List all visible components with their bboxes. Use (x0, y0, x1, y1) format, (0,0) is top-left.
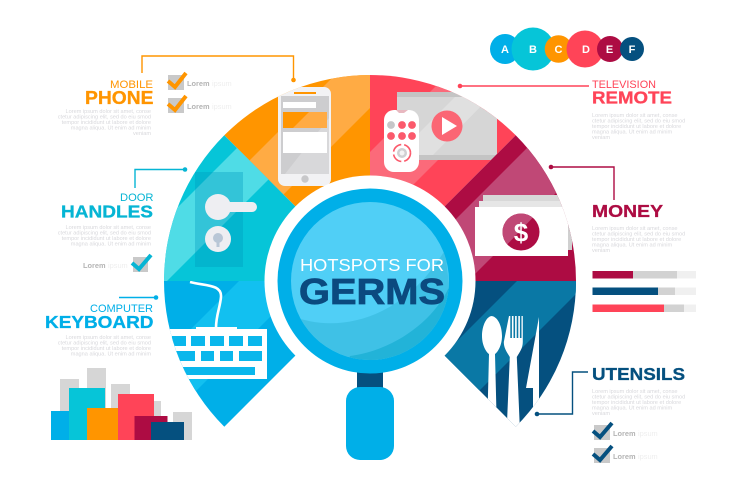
icon: door handle (195, 172, 257, 267)
checklist: utensils: Lorem (613, 452, 636, 461)
checklist: phone: ipsum (212, 102, 232, 111)
block: door handles (58, 167, 187, 272)
legend circles A-F (490, 28, 644, 70)
magnifying glass (264, 176, 476, 460)
block: utensils: magna aliqua. Ut enim ad minim (592, 406, 673, 412)
block: mobile phone: ctetur adipiscing elit, sed do eiu smod (58, 114, 151, 120)
block: money: Lorem ipsum dolor sit amet, conse (592, 226, 678, 232)
block: utensils: veniam (592, 411, 610, 417)
block: television remote: TELEVISION (592, 79, 656, 91)
legend circles A-F: F (629, 44, 636, 56)
text: germs: GERMS (299, 271, 445, 312)
bar chart: stacked blocks (51, 368, 192, 440)
block: door handles: DOOR (120, 192, 154, 204)
block: money: tempor incididunt ut labore et dolore (592, 237, 681, 243)
checklist: phone: Lorem (187, 79, 210, 88)
icon: spoon (482, 316, 502, 414)
block: mobile phone: Lorem ipsum dolor sit amet, conse (66, 109, 151, 115)
block: mobile phone: magna aliqua. Ut enim ad minim (71, 126, 151, 132)
block: television remote: magna aliqua. Ut enim ad minim (592, 130, 673, 136)
panel: mobile phone sector (224, 75, 370, 206)
block: door handles: magna aliqua. Ut enim ad minim (71, 242, 151, 248)
block: mobile phone: MOBILE (110, 79, 153, 91)
checklist: phone: ipsum (212, 79, 232, 88)
block: door handles: ctetur adipiscing elit, sed do eiu smod (58, 230, 151, 236)
block: money: ctetur adipiscing elit, sed do eiu smod (592, 232, 685, 238)
block: television remote: Lorem ipsum dolor sit amet, conse (592, 113, 678, 119)
checklist: phone: Lorem (187, 102, 210, 111)
checklist: utensils: Lorem (613, 429, 636, 438)
block: mobile phone: tempor incididunt ut labore et dolore (62, 120, 151, 126)
icon: television (397, 92, 497, 160)
icon: remote control (384, 110, 419, 172)
text: hotspots for: HOTSPOTS FOR (300, 255, 444, 275)
checklist: utensils: ipsum (638, 452, 658, 461)
panel: computer keyboard sector (164, 281, 296, 427)
panel: door handles sector (164, 135, 296, 281)
block: money: magna aliqua. Ut enim ad minim (592, 242, 673, 248)
block: door handles: Lorem ipsum dolor sit amet, conse (66, 225, 151, 231)
block: utensils: ctetur adipiscing elit, sed do eiu smod (592, 394, 685, 400)
icon: fork (504, 316, 523, 427)
checklist: door: ipsum (108, 261, 128, 270)
icon: knife (526, 317, 539, 407)
block: television remote: ctetur adipiscing elit, sed do eiu smod (592, 118, 685, 124)
block: utensils (535, 364, 685, 463)
legend circles A-F: A (501, 44, 509, 56)
block: mobile phone: PHONE (85, 88, 154, 108)
block: television remote: veniam (592, 135, 610, 141)
block: computer keyboard (45, 295, 158, 358)
block: money (549, 165, 685, 254)
block: computer keyboard: Lorem ipsum dolor sit amet, conse (66, 335, 151, 341)
block: money: MONEY (592, 201, 663, 221)
block: computer keyboard: COMPUTER (90, 303, 153, 315)
block: utensils: tempor incididunt ut labore et dolore (592, 400, 681, 406)
legend circles A-F: B (529, 44, 537, 56)
block: computer keyboard: KEYBOARD (45, 312, 154, 332)
checklist: door: Lorem (83, 261, 106, 270)
block: television remote: REMOTE (592, 87, 672, 107)
checklist: door (83, 255, 151, 272)
block: mobile phone: veniam (133, 131, 151, 137)
checklist: utensils: ipsum (638, 429, 658, 438)
block: computer keyboard: tempor incididunt ut labore et dolore (62, 346, 151, 352)
icon: banknotes: $ (514, 218, 529, 248)
legend circles A-F: D (582, 44, 590, 56)
block: door handles: HANDLES (61, 201, 153, 221)
block: utensils: Lorem ipsum dolor sit amet, conse (592, 389, 678, 395)
block: utensils: UTENSILS (592, 364, 685, 384)
block: television remote (458, 79, 685, 141)
block: computer keyboard: ctetur adipiscing elit, sed do eiu smod (58, 340, 151, 346)
block: mobile phone (58, 56, 296, 137)
panel: utensils sector (444, 281, 576, 427)
icon: banknotes (475, 195, 572, 256)
legend circles A-F: C (555, 44, 563, 56)
legend circles A-F: E (606, 44, 613, 56)
block: money: veniam (592, 248, 610, 254)
block: door handles: tempor incididunt ut labore et dolore (62, 236, 151, 242)
panel: television remote sector (370, 75, 516, 206)
checklist: utensils (593, 423, 658, 463)
icon: keyboard (160, 282, 267, 379)
checklist: phone (168, 73, 232, 113)
bar chart: progress bars (592, 271, 696, 312)
block: television remote: tempor incididunt ut labore et dolore (592, 124, 681, 130)
panel: money sector (444, 135, 576, 281)
icon: mobile phone (278, 87, 331, 186)
block: computer keyboard: magna aliqua. Ut enim ad minim (71, 352, 151, 358)
